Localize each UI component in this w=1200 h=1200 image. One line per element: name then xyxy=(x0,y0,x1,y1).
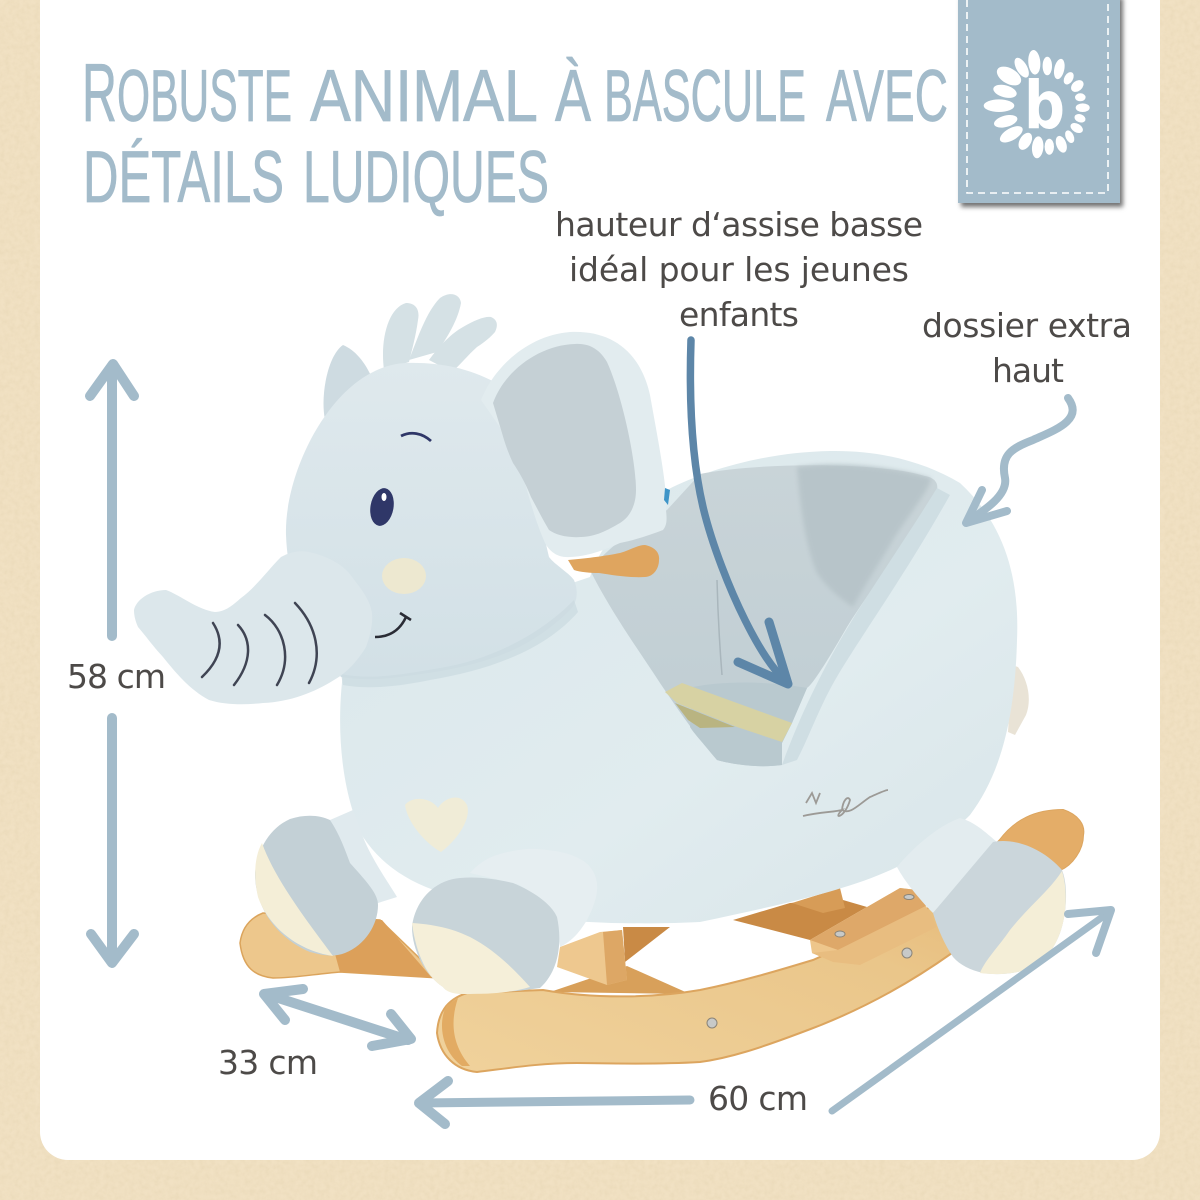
seat rim xyxy=(782,488,950,765)
small blue tag xyxy=(664,488,670,505)
far ear xyxy=(324,345,372,420)
arrow: seat height (dark blue) xyxy=(690,340,788,684)
label: seat height xyxy=(555,205,923,334)
label: seat height: hauteur d‘assise basse xyxy=(555,205,923,244)
label: backrest: dossier extra xyxy=(922,306,1132,345)
title: ANIMAL xyxy=(310,56,538,137)
arrow: height 58 cm xyxy=(90,364,134,963)
label: seat height: idéal pour les jeunes xyxy=(569,250,909,289)
rocking elephant product xyxy=(134,294,1083,1072)
arrow: width 60 cm left xyxy=(419,1081,690,1124)
title: AVEC xyxy=(826,56,948,137)
front leg and foot xyxy=(412,849,597,994)
signature xyxy=(803,790,888,816)
head xyxy=(286,363,577,679)
label: 60 cm: 60 cm xyxy=(708,1079,808,1118)
rocker: back xyxy=(240,913,440,978)
label: 58 cm: 58 cm xyxy=(67,657,166,696)
heart xyxy=(405,798,468,852)
rocker: foot plank xyxy=(810,888,937,965)
seat back panel xyxy=(797,464,931,607)
label: 33 cm: 33 cm xyxy=(218,1043,318,1082)
cheek xyxy=(382,558,426,594)
title: À xyxy=(555,56,591,137)
title: BASCULE xyxy=(604,56,806,137)
title: DÉTAILS xyxy=(83,137,284,218)
label: backrest: haut xyxy=(992,351,1064,390)
arrow: depth 33 cm xyxy=(264,989,411,1046)
ear xyxy=(481,332,667,557)
label: backrest xyxy=(922,306,1132,390)
tail xyxy=(1008,665,1029,735)
title: ROBUSTE xyxy=(82,46,292,139)
tuft xyxy=(383,294,497,372)
title xyxy=(82,46,948,218)
mouth xyxy=(375,613,411,637)
screws xyxy=(707,894,914,1028)
collar shade xyxy=(341,600,578,687)
arrow: backrest xyxy=(966,398,1073,523)
eyebrow xyxy=(401,433,431,441)
body with seat xyxy=(340,451,1017,923)
rocker: cross pieces xyxy=(623,927,670,962)
strap xyxy=(665,683,792,742)
seat interior xyxy=(590,465,937,766)
handle xyxy=(568,545,659,577)
seat crease xyxy=(717,580,722,675)
back left leg and foot xyxy=(255,810,397,956)
arrow: width 60 cm right xyxy=(832,910,1111,1111)
back right leg and foot xyxy=(897,818,1066,974)
seat cushion xyxy=(690,683,807,766)
icon: brand flower logo xyxy=(984,50,1090,159)
rocker: front xyxy=(437,810,1083,1072)
label: seat height: enfants xyxy=(679,295,799,334)
title: LUDIQUES xyxy=(303,137,549,218)
brand tag xyxy=(958,0,1120,203)
trunk xyxy=(134,551,372,704)
icon: brand flower logo: b xyxy=(1024,67,1065,144)
trunk lines xyxy=(202,603,317,685)
eye xyxy=(367,486,397,528)
